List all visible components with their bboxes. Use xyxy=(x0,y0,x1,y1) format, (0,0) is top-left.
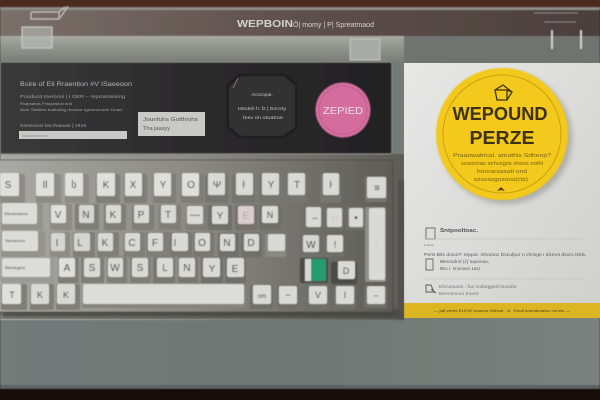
keyboard xyxy=(0,160,400,318)
key: row 2 xyxy=(1,203,365,230)
icon: box xyxy=(495,85,512,100)
key: row 1: K xyxy=(103,180,110,191)
sticker title: WEPOUND xyxy=(452,103,548,124)
key: row 5: ~ xyxy=(285,290,291,300)
card section: details xyxy=(424,252,586,271)
key: row 1 xyxy=(0,173,387,203)
panel description: Acar Sablers Icalusing monsor igmonocmer Doad xyxy=(20,107,122,112)
key: row 3: K xyxy=(102,238,109,249)
label card xyxy=(138,112,205,136)
octagon badge: fesv on otoatroe xyxy=(243,115,283,121)
key: row 1: Ψ xyxy=(213,180,221,191)
key: row 1: X xyxy=(130,180,137,191)
key: row 3: W xyxy=(306,240,316,251)
key: row 2: V xyxy=(55,210,62,221)
panel description xyxy=(20,94,126,128)
key: row 4: A xyxy=(64,263,71,274)
key: green xyxy=(300,258,328,283)
key: row 1: ŀ xyxy=(242,180,246,191)
yellow footer strip xyxy=(404,303,600,318)
key: row 1: O xyxy=(187,180,195,191)
sticker title xyxy=(452,103,548,148)
key: row 2: — xyxy=(190,210,200,221)
key: row 5: V xyxy=(315,290,321,300)
sticker text xyxy=(453,153,551,183)
card section: note: Elsnotaoss : fux sodutgpetrnsoadnr xyxy=(439,284,517,289)
key: small right: D xyxy=(343,266,350,276)
card section: heading: Sntpooltoac. xyxy=(440,228,479,234)
key: row 3: N xyxy=(223,238,231,249)
yellow circular sticker xyxy=(436,68,572,204)
card section: heading xyxy=(424,228,586,247)
key: row 5: – xyxy=(373,290,379,300)
panel heading: Bsire of Eli Rraention #V ISaeeoon xyxy=(20,81,132,88)
key: row 2: N xyxy=(82,210,90,221)
header text xyxy=(237,18,374,30)
key: row 2: – xyxy=(312,213,318,224)
pink badge xyxy=(316,82,370,138)
octagon badge: Istedeh h: fz | Dorcrty xyxy=(238,106,287,112)
key: row 3: I xyxy=(56,238,58,249)
key: row 1: Il xyxy=(42,180,48,191)
key: row 5: K xyxy=(37,290,43,300)
keyboard plate xyxy=(0,160,393,312)
key: row 2: P xyxy=(138,210,145,221)
key: row 5 xyxy=(1,284,387,310)
key: row 4: N xyxy=(183,263,191,274)
sticker text: szsossgosoos(cts) xyxy=(474,177,528,183)
key: row 1: ŀ xyxy=(329,180,333,191)
card section: details: Peris Bits dosoi'F reppar. Ghorsoc Dscufpor n clmsge i dSmot dsors NSIL xyxy=(424,252,586,257)
key: row 3: F xyxy=(152,238,158,249)
key: row 1: Y xyxy=(268,180,275,191)
key: row 1: ს xyxy=(71,179,77,191)
key: row 4: Y xyxy=(209,264,216,275)
label card: Tha jaasyy xyxy=(143,126,170,132)
key: tall enter xyxy=(365,207,386,282)
key: small right xyxy=(331,261,357,284)
key: row 3: I xyxy=(174,238,176,249)
panel description: Rsapsanos Praspcstion and xyxy=(20,102,72,106)
card section: note xyxy=(426,284,517,296)
sticker text: seaxonas sehvsgss shoos nothi xyxy=(461,161,543,167)
key: row 2: □ xyxy=(333,214,338,223)
key: row 4: W xyxy=(110,263,120,274)
key: row 2: E xyxy=(243,211,250,222)
sticker text: horoarsasatl ond xyxy=(477,169,527,175)
keyboard tray shadow xyxy=(0,309,400,318)
key: row 4: Beheges xyxy=(5,265,25,270)
key: row 3: O xyxy=(198,238,206,249)
input bar: Saoesoereo xyxy=(22,133,49,138)
label card: Jounfuhs Gotthiohs xyxy=(143,117,198,123)
dark info panel xyxy=(0,62,392,154)
key: row 1: S xyxy=(5,180,12,191)
key: row 1: ≡ xyxy=(374,183,380,194)
sticker title: PERZE xyxy=(470,128,534,148)
key: tall enter: · xyxy=(375,238,377,247)
header text: Ô| momy | P| Spreatmaod xyxy=(293,20,374,29)
key: row 4: L xyxy=(162,263,168,274)
key: row 4 xyxy=(1,257,246,283)
key: row 2: T xyxy=(165,210,171,221)
panel description: Pnoducit Inerorsii | I OER – reprosntesing xyxy=(20,94,126,99)
key: row 5: K xyxy=(63,290,69,300)
key: row 2: Ssoessoo xyxy=(4,211,29,216)
clip: top right xyxy=(534,13,581,49)
sticker text: Praaowatrical. amathis Sdhenp? xyxy=(453,153,551,159)
white instruction card xyxy=(404,63,600,318)
key: row 2: • xyxy=(354,213,358,224)
panel description: Ssmenoos lea thaeuse | 1919 xyxy=(20,123,86,128)
card section: details: Bsx I. Imoooss 1as) xyxy=(440,266,480,271)
key: row 4: S xyxy=(89,263,96,274)
octagon badge xyxy=(228,75,296,137)
card section: note: Beeosmoor tnoctz xyxy=(439,291,480,296)
card shadow edge xyxy=(398,180,404,320)
key: row 2: N xyxy=(267,210,273,220)
icon: small star xyxy=(497,187,505,191)
header text: WEPBOIN xyxy=(237,18,293,30)
key: row 5: T xyxy=(9,290,15,300)
key: row 4: S xyxy=(137,263,144,274)
key: row 2: K xyxy=(110,210,117,221)
key: row 3: Ssoesoo xyxy=(5,238,26,243)
key: row 4: E xyxy=(232,264,239,275)
key: row 3: C xyxy=(128,238,136,249)
key: row 3: L xyxy=(77,238,83,249)
key: row 1: T xyxy=(294,180,300,191)
clip: top center xyxy=(350,39,380,60)
key: row 1: Y xyxy=(160,180,167,191)
input bar xyxy=(19,131,127,139)
key: row 2: Y xyxy=(217,211,224,222)
key: row 3: ! xyxy=(334,240,336,251)
card section: details: Blerosdrof (z) sqoonsu, xyxy=(440,259,489,264)
yellow footer strip: — jatt vertre ELEVE sourcre Dribust · & · Esoft sdorokoanss Xorsirz — xyxy=(434,308,570,313)
card section: heading: & hlooo xyxy=(424,243,435,247)
key: row 3 xyxy=(1,231,344,257)
key: row 5: om xyxy=(258,294,266,300)
key: row 3: D xyxy=(247,238,255,249)
octagon badge: Aicoropat. xyxy=(251,92,273,98)
clip: top left xyxy=(22,6,68,48)
key: row 5: I xyxy=(344,290,346,300)
pink badge: ZEPIED xyxy=(323,105,363,117)
